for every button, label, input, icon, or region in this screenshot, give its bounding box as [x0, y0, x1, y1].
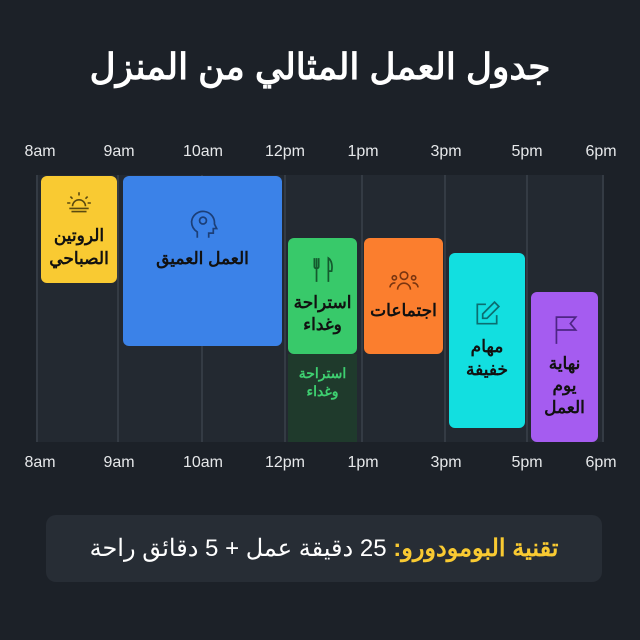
block: light tasks: خفيفة: [466, 360, 508, 378]
top time labels: 6pm: [585, 143, 617, 160]
bottom time labels: 9am: [103, 454, 135, 471]
top time labels: 9am: [103, 143, 135, 160]
block: deep work: [123, 176, 282, 346]
timeline grid: [38, 175, 602, 442]
faded lunch area: وغداء: [307, 383, 338, 399]
icon: fork knife: [314, 256, 333, 282]
block: lunch: وغداء: [303, 315, 342, 334]
bottom time labels: 12pm: [265, 454, 305, 471]
icon: edit: [476, 301, 500, 324]
block: end of day: يوم: [552, 376, 577, 395]
bottom time labels: 3pm: [430, 454, 462, 471]
icon: head gear: [190, 210, 218, 238]
block: light tasks: مهام: [471, 337, 503, 356]
block: end of day: العمل: [544, 398, 585, 417]
block: lunch: استراحة: [294, 293, 351, 312]
block: light tasks: [449, 253, 525, 428]
top time labels: 5pm: [511, 143, 543, 160]
pomodoro callout: تقنية البومودورو: 25 دقيقة عمل + 5 دقائق راحة: [90, 535, 558, 562]
pomodoro callout: [46, 515, 602, 582]
block: end of day: [531, 292, 598, 442]
block: end of day: نهاية: [549, 354, 580, 373]
faded lunch area: استراحة: [299, 365, 346, 381]
top time labels: 12pm: [265, 143, 305, 160]
block: meetings: [364, 238, 443, 354]
block: morning routine: [41, 176, 117, 283]
top time labels: 8am: [24, 143, 56, 160]
bottom time labels: 8am: [24, 454, 56, 471]
bottom time labels: 10am: [183, 454, 223, 471]
icon: flag: [556, 316, 578, 344]
bottom time labels: 6pm: [585, 454, 617, 471]
block: morning routine: الروتين: [54, 226, 104, 245]
icon: people: [389, 271, 419, 290]
top time labels: 3pm: [430, 143, 462, 160]
bottom time labels: [24, 454, 617, 471]
block: morning routine: الصباحي: [49, 248, 109, 268]
bottom time labels: 1pm: [347, 454, 379, 471]
top time labels: 10am: [183, 143, 223, 160]
block: lunch: [288, 238, 357, 354]
icon: sunrise: [67, 192, 91, 212]
title: جدول العمل المثالي من المنزل: [89, 46, 551, 87]
faded lunch area: [288, 354, 357, 442]
block: deep work: العمل العميق: [156, 249, 249, 268]
top time labels: [24, 143, 617, 160]
bottom time labels: 5pm: [511, 454, 543, 471]
block: meetings: اجتماعات: [370, 301, 437, 320]
top time labels: 1pm: [347, 143, 379, 160]
